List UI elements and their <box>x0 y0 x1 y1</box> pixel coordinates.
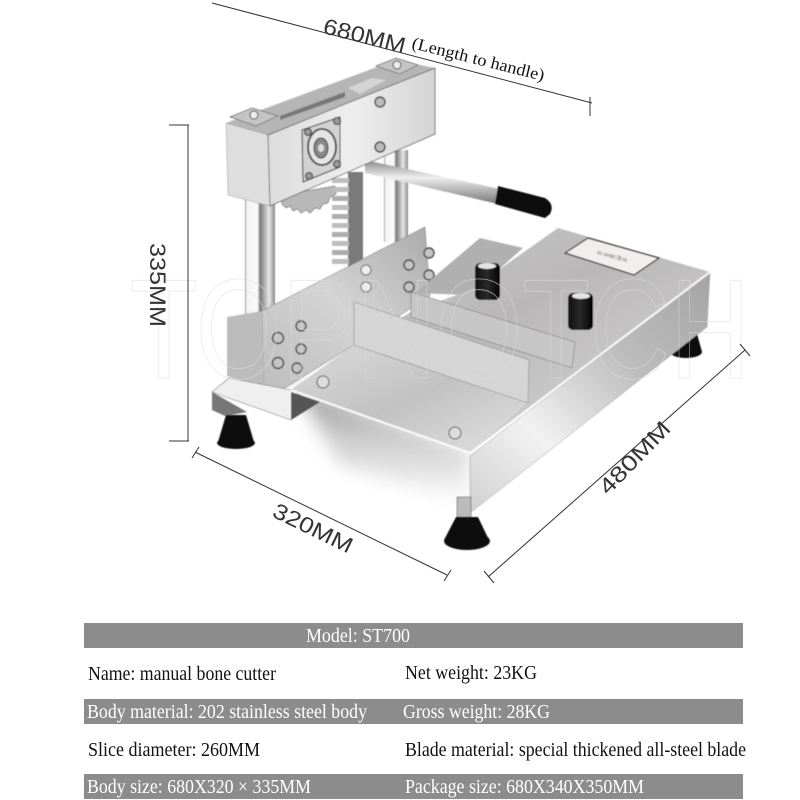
row: name and net weight <box>88 662 537 685</box>
head block <box>226 58 435 206</box>
dimension: width 320MM: 320MM <box>269 498 357 558</box>
dimension: depth 480MM: 480MM <box>594 416 676 499</box>
row: model <box>84 623 743 648</box>
table front edge highlight <box>291 272 710 453</box>
knob two <box>568 293 593 330</box>
upright plate <box>262 227 434 390</box>
row: name and net weight: Net weight: 23KG <box>405 662 537 684</box>
left column <box>245 198 275 320</box>
label plate <box>565 238 659 275</box>
front fence <box>354 302 529 403</box>
handle grip <box>495 186 552 218</box>
row: slice diameter and blade material: Blade material: special thickened all-steel blade <box>405 739 746 761</box>
toothed rack <box>332 172 363 267</box>
dimension: length 680MM <box>212 3 592 116</box>
row: body size and package size: Package size: 680X340X350MM <box>405 776 644 798</box>
left foot <box>217 415 255 449</box>
table top <box>291 228 710 453</box>
gear <box>282 186 336 213</box>
dimension: depth 480MM <box>484 344 750 583</box>
dimension: length 680MM: 680MM <box>321 14 408 58</box>
table screws <box>317 376 461 439</box>
dimension: length 680MM: (Length to handle) <box>410 33 547 85</box>
row: body material and gross weight: Gross weight: 28KG <box>403 701 550 723</box>
front foot <box>444 497 490 550</box>
knob one <box>475 263 500 300</box>
head bolts <box>375 97 385 152</box>
label plate: M-300BC冻1K <box>596 249 629 264</box>
right top bracket <box>376 58 418 74</box>
plate bolts <box>272 248 434 373</box>
left top bracket <box>230 108 278 126</box>
handle tube <box>365 160 500 204</box>
row: model: Model: ST700 <box>306 625 410 647</box>
table side panel <box>470 272 710 513</box>
row: slice diameter and blade material <box>88 739 746 761</box>
rear fence <box>411 292 575 368</box>
front shelf <box>291 345 529 453</box>
row: body size and package size: Body size: 680X320 × 335MM <box>87 776 311 798</box>
row: name and net weight: Name: manual bone cutter <box>88 663 276 685</box>
row: body size and package size <box>84 774 743 799</box>
rear foot <box>670 330 702 358</box>
row: body material and gross weight <box>84 699 743 724</box>
base bracket <box>212 311 320 420</box>
dimension: height 335MM: 335MM <box>145 243 170 327</box>
floor shadow <box>295 385 470 505</box>
specification table <box>84 623 746 799</box>
row: slice diameter and blade material: Slice diameter: 260MM <box>88 739 260 761</box>
bearing plate <box>302 117 340 182</box>
row: body material and gross weight: Body material: 202 stainless steel body <box>87 701 367 723</box>
table rear section <box>415 238 523 295</box>
right column <box>384 150 408 242</box>
dimension: width 320MM <box>192 447 451 581</box>
machine: manual bone cutter <box>212 58 710 550</box>
